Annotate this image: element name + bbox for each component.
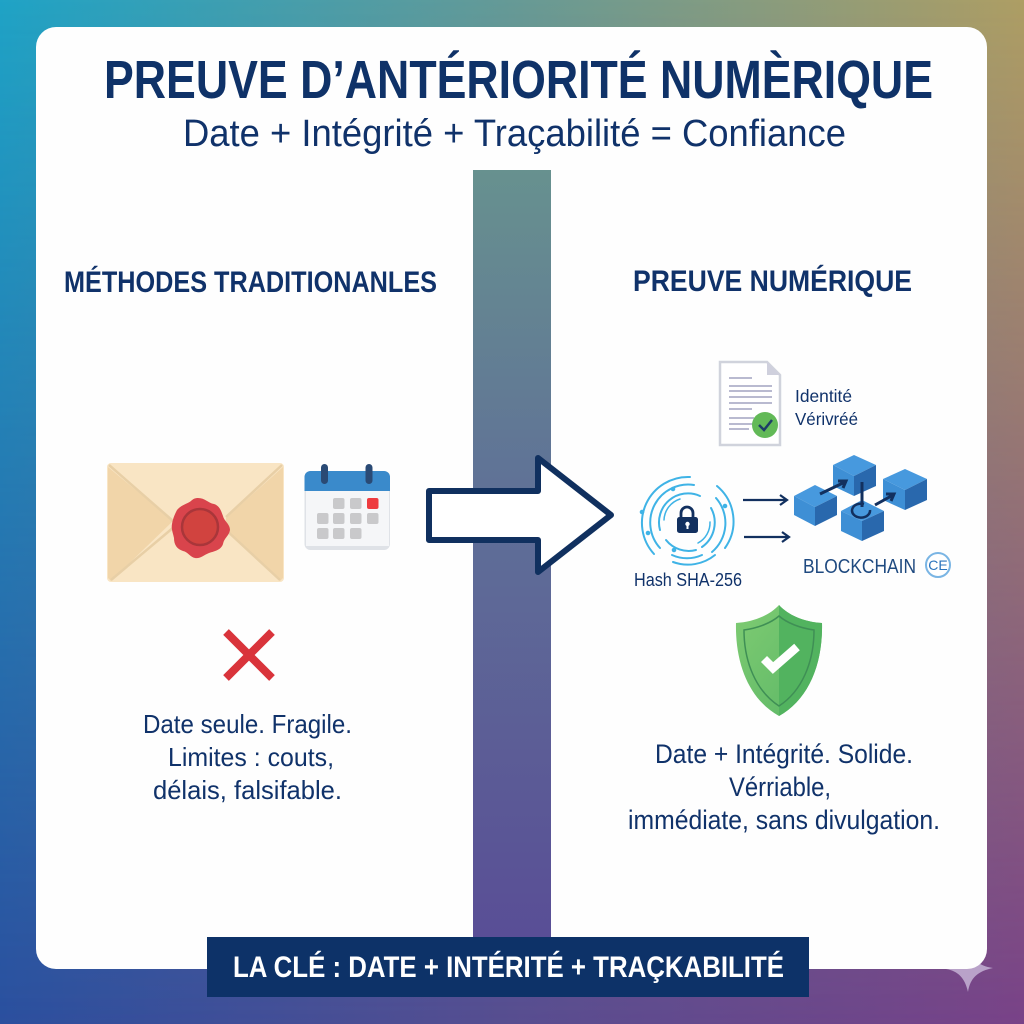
- label: hash: Hash SHA-256: [634, 570, 742, 590]
- icon: hash lock with rings: [640, 477, 734, 565]
- bottom banner: LA CLÉ : DATE + INTÉRITÉ + TRAÇKABILITÉ: [233, 950, 784, 984]
- subtitle: Date + Intégrité + Traçabilité = Confiance: [183, 113, 846, 155]
- icon: red cross: [226, 632, 272, 678]
- text: traditional limits: [143, 709, 352, 805]
- icon: CE badge: CE: [928, 557, 948, 573]
- text: digital proof benefits: Vérriable,: [729, 772, 831, 802]
- label: verified identity: Vérivréé: [795, 409, 858, 429]
- arrows: hash to blockchain: [743, 495, 789, 542]
- text: traditional limits: Limites : couts,: [168, 742, 334, 772]
- text: digital proof benefits: [628, 739, 940, 835]
- label: verified identity: Identité: [795, 386, 852, 406]
- central vertical band: [473, 170, 551, 937]
- text: traditional limits: délais, falsifable.: [153, 775, 342, 805]
- label: blockchain: BLOCKCHAIN: [803, 556, 916, 578]
- icon: CE badge: [926, 553, 950, 577]
- icon: green shield: [736, 605, 822, 716]
- heading: traditional methods: MÉTHODES TRADITIONANLES: [64, 265, 437, 299]
- heading: digital proof: PREUVE NUMÉRIQUE: [633, 264, 912, 298]
- arrow: [429, 458, 611, 572]
- text: digital proof benefits: immédiate, sans divulgation.: [628, 805, 940, 835]
- text: traditional limits: Date seule. Fragile.: [143, 709, 352, 739]
- text: digital proof benefits: Date + Intégrité. Solide.: [655, 739, 913, 769]
- decorative star: [946, 944, 993, 992]
- icon: verified document: [720, 362, 780, 445]
- icon: sealed envelope: [107, 463, 284, 582]
- label: verified identity: [795, 386, 858, 429]
- bottom banner: [207, 937, 809, 997]
- icon: blockchain cubes: [794, 455, 927, 541]
- icon: calendar: [304, 464, 390, 550]
